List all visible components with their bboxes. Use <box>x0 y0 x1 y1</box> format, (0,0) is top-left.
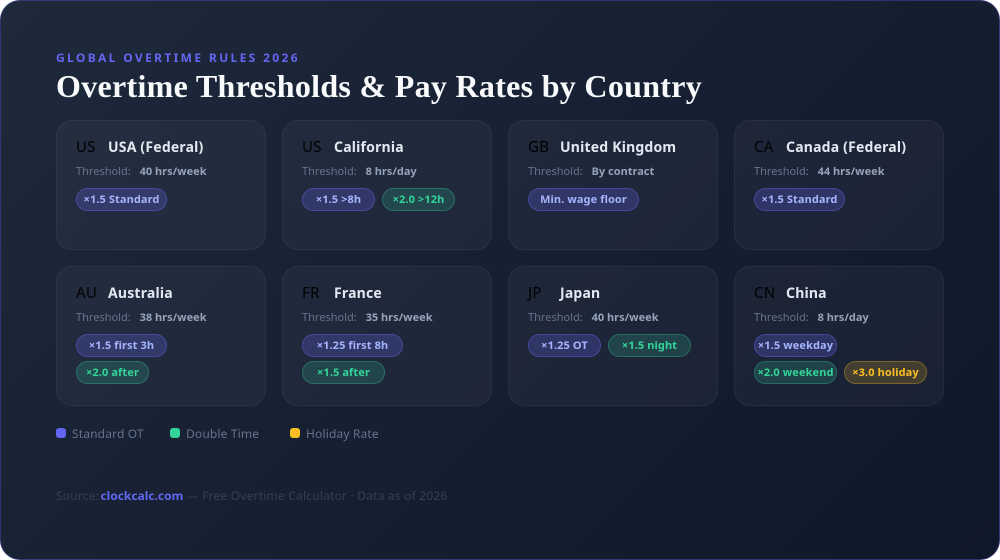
pill: standard <box>76 334 167 357</box>
pill: standard <box>76 188 167 211</box>
threshold: Threshold: 38 hrs/week <box>76 310 207 325</box>
legend swatch: standard <box>56 428 66 438</box>
pill: double <box>382 188 455 211</box>
pill: standard: ×1.5 Standard <box>84 192 159 207</box>
country name: Japan <box>560 284 600 303</box>
pill: standard <box>302 334 403 357</box>
pill: standard: ×1.5 first 3h <box>89 338 154 353</box>
threshold: Threshold: 8 hrs/day <box>754 310 869 325</box>
legend label: standard: Standard OT <box>72 425 144 442</box>
country code: FR <box>302 283 320 303</box>
pill: standard: ×1.5 >8h <box>316 192 361 207</box>
country code: CN <box>754 283 775 303</box>
pill: double <box>754 361 837 384</box>
country code: US <box>76 137 96 157</box>
country name: China <box>786 284 827 303</box>
pill: double: ×2.0 after <box>86 365 139 380</box>
pill: standard <box>754 188 845 211</box>
threshold: Threshold: 8 hrs/day <box>302 164 417 179</box>
country code: US <box>302 137 322 157</box>
pill: standard: ×1.5 Standard <box>762 192 837 207</box>
legend swatch: holiday <box>290 428 300 438</box>
pill: double: ×1.5 after <box>317 365 370 380</box>
panel: California <box>282 120 492 250</box>
eyebrow heading: GLOBAL OVERTIME RULES 2026 <box>56 49 300 66</box>
legend label: double: Double Time <box>186 425 259 442</box>
panel: Canada (Federal) <box>734 120 944 250</box>
threshold: Threshold: 44 hrs/week <box>754 164 885 179</box>
pill: standard <box>754 334 837 357</box>
pill: standard <box>302 188 375 211</box>
pill: double <box>76 361 149 384</box>
pill: standard: ×1.25 OT <box>541 338 588 353</box>
country name: California <box>334 138 404 157</box>
country name: Canada (Federal) <box>786 138 906 157</box>
pill: holiday: ×3.0 holiday <box>852 365 919 380</box>
country code: CA <box>754 137 774 157</box>
title: Overtime Thresholds & Pay Rates by Country <box>56 68 702 104</box>
pill: holiday <box>844 361 927 384</box>
country code: JP <box>528 283 542 303</box>
threshold: Threshold: 35 hrs/week <box>302 310 433 325</box>
pill: double <box>302 361 385 384</box>
country name: United Kingdom <box>560 138 676 157</box>
panel: Japan <box>508 266 718 406</box>
country name: Australia <box>108 284 173 303</box>
threshold: Threshold: 40 hrs/week <box>528 310 659 325</box>
pill: double: ×2.0 >12h <box>393 192 444 207</box>
pill: standard: ×1.25 first 8h <box>317 338 388 353</box>
threshold: Threshold: 40 hrs/week <box>76 164 207 179</box>
pill: double: ×1.5 night <box>622 338 677 353</box>
country code: GB <box>528 137 549 157</box>
panel: China <box>734 266 944 406</box>
country name: USA (Federal) <box>108 138 204 157</box>
panel: USA (Federal) <box>56 120 266 250</box>
legend <box>56 425 379 442</box>
panel: United Kingdom <box>508 120 718 250</box>
panel: Australia <box>56 266 266 406</box>
legend swatch: double <box>170 428 180 438</box>
pill: standard: ×1.5 weekday <box>758 338 833 353</box>
country code: AU <box>76 283 97 303</box>
pill: standard <box>528 188 639 211</box>
threshold: Threshold: By contract <box>528 164 654 179</box>
source footer: Source: clockcalc.com — Free Overtime Calculator · Data as of 2026 <box>56 487 448 504</box>
panel: France <box>282 266 492 406</box>
pill: double: ×2.0 weekend <box>757 365 834 380</box>
legend label: holiday: Holiday Rate <box>306 425 379 442</box>
country name: France <box>334 284 382 303</box>
pill: standard: Min. wage floor <box>540 192 627 207</box>
pill: standard <box>528 334 601 357</box>
pill: double <box>608 334 691 357</box>
